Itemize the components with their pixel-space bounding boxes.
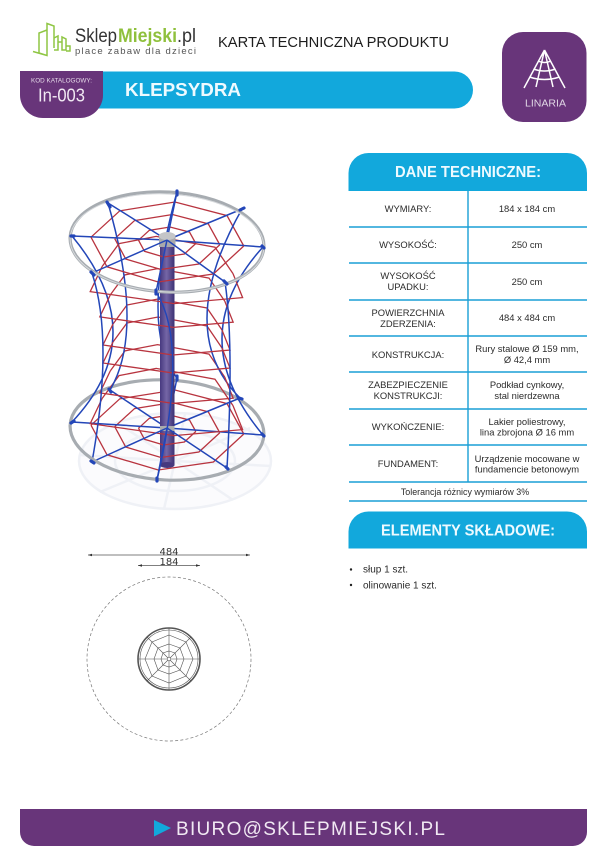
title: product sheet: KARTA TECHNICZNA PRODUKTU [218,34,449,51]
row: construction [372,343,579,365]
category label: LINARIA [525,98,566,110]
row: protection: KONSTRUKCJI: [374,390,442,401]
row: construction: Rury stalowe Ø 159 mm, [475,343,579,354]
row: finish: lina zbrojona Ø 16 mm [480,426,574,438]
technical data table [348,153,587,501]
row: height [379,239,543,250]
table grid [349,191,587,501]
footer contact bar [20,809,587,846]
logo name: .pl [177,26,196,47]
top ring [68,187,266,297]
product name: KLEPSYDRA [125,79,241,100]
tolerance note: Tolerancja różnicy wymiarów 3% [401,487,529,497]
components header [348,512,587,548]
category badge: linaria [502,32,586,122]
dimension: 184 [138,557,200,568]
bottom ring, back half [70,375,266,435]
row: protection [368,379,564,401]
row: finish: Lakier poliestrowy, [489,416,565,427]
safety zone circle [87,577,251,741]
row: fall height [380,270,543,292]
row: dimensions: 184 x 184 cm [499,203,555,214]
ground shadow [79,413,271,509]
bottom ring, front [68,425,264,485]
logo name [75,26,196,47]
row: dimensions [385,203,555,214]
row: height: 250 cm [512,239,543,250]
product illustration: hourglass rope structure [68,187,271,509]
catalog label: KOD KATALOGOWY: [31,78,92,84]
row: height: WYSOKOŚĆ: [379,239,437,250]
product name bar [60,72,473,108]
row: protection: Podkład cynkowy, [490,379,564,390]
components panel [348,512,587,592]
front ropes [90,237,244,480]
row: foundation: fundamencie betonowym [475,464,579,474]
components list: słup 1 szt. [363,564,408,576]
row: protection: stal nierdzewna [494,390,560,401]
central pole [159,232,176,468]
icon: green city outline [33,24,70,56]
dimension: 484: 484 [159,547,179,558]
row: finish: WYKOŃCZENIE: [372,421,444,432]
row: protection: ZABEZPIECZENIE [368,379,448,390]
row: impact area [372,307,555,329]
row: fall height: WYSOKOŚĆ [380,270,436,281]
row: impact area: POWIERZCHNIA [372,307,445,318]
row: fall height: 250 cm [512,276,543,287]
row: dimensions: WYMIARY: [385,203,431,214]
row: construction: KONSTRUKCJA: [372,349,444,360]
row: impact area: ZDERZENIA: [380,318,436,329]
components header: ELEMENTY SKŁADOWE: [381,522,555,540]
catalog code tab [20,71,103,118]
contact email: BIURO@SKLEPMIEJSKI.PL [176,819,445,840]
row: finish [372,416,574,438]
row: foundation: FUNDAMENT: [378,458,438,469]
plan drawing with dimensions [87,547,251,741]
net plan [138,628,200,690]
row: impact area: 484 x 484 cm [499,312,555,323]
icon: play arrow [154,820,171,836]
row: foundation [378,453,580,474]
logo tagline: place zabaw dla dzieci [75,46,196,57]
icon: rope net [524,50,565,88]
table header [348,153,587,191]
logo name: Miejski [118,26,177,47]
back ropes [72,192,263,435]
rope clamps on rings [71,191,264,481]
row: fall height: UPADKU: [388,281,428,292]
dimension: 184: 184 [159,557,179,568]
row: foundation: Urządzenie mocowane w [475,453,580,464]
components list [350,564,437,592]
table header: DANE TECHNICZNE: [395,164,541,181]
row: construction: Ø 42,4 mm [504,354,550,365]
logo name: Sklep [75,26,117,47]
components list: olinowanie 1 szt. [363,580,437,592]
logo [33,24,196,57]
catalog number: In-003 [38,86,85,106]
